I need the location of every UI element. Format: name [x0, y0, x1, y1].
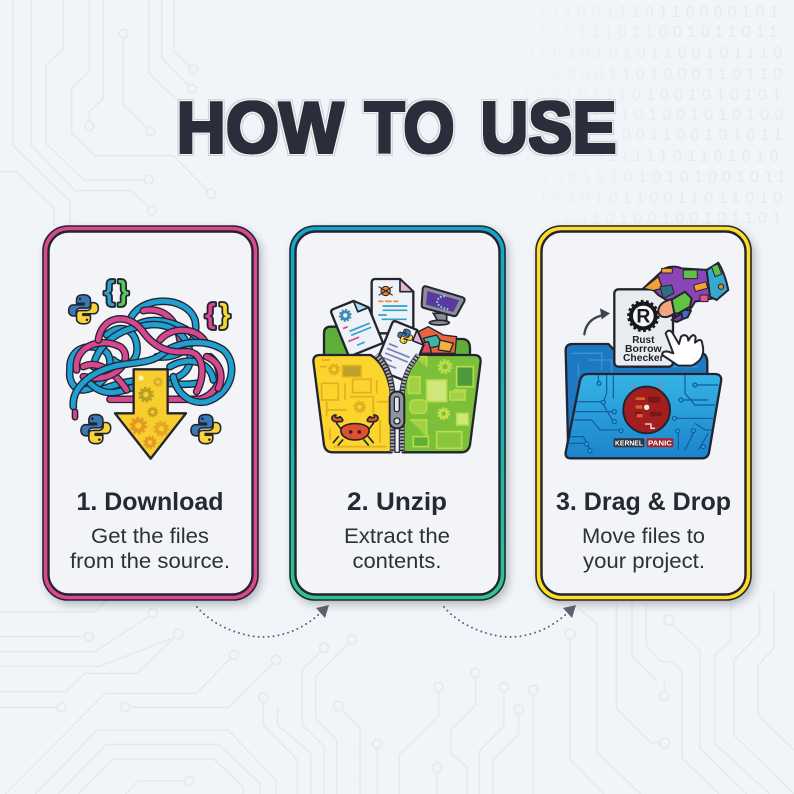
title: USE: [480, 88, 616, 168]
card frame 1: [43, 226, 258, 600]
text block 3: your project.: [583, 550, 705, 573]
binary pattern background: 0010101010100101010101001011: [400, 169, 791, 186]
icon: braces and python logos: }: [220, 298, 231, 329]
front of folder: [566, 374, 721, 458]
text block 3: Move files to: [582, 525, 705, 548]
kernel panic label: [614, 438, 673, 447]
panel: step 3 drag and drop: [536, 226, 751, 600]
text block 2: Extract the: [344, 525, 450, 548]
text block 3: [582, 525, 705, 573]
icon: braces and python logos: [69, 275, 231, 444]
binary pattern background: 1001101001110111011001011011: [400, 24, 782, 41]
icon: crab: [332, 415, 378, 445]
icon: braces and python logos: {: [104, 275, 115, 306]
text block 1: [70, 525, 230, 573]
zipper pull: [390, 392, 404, 428]
arrow: step 2 to step 3: [444, 605, 576, 637]
green folder half: [403, 355, 481, 452]
back of folder: [566, 344, 707, 453]
icon: monitor: [422, 286, 465, 325]
binary pattern background: 0110101011001001001100101011: [400, 127, 787, 144]
arrow: step 1 to step 2: [197, 605, 329, 637]
panel: step 1 download: [43, 226, 258, 600]
binary pattern background: 1100010010101010110011011010: [400, 190, 787, 207]
icon: folder with rust file and hand: [566, 263, 728, 458]
icon: document with gear: [330, 297, 383, 357]
yellow folder half: [313, 355, 392, 452]
title: [176, 88, 616, 168]
text block 1: from the source.: [70, 550, 230, 573]
zipper: [376, 354, 418, 452]
panel: step 2 unzip: [290, 226, 505, 600]
binary pattern background: 1010110100010001101000110110: [400, 66, 787, 83]
cables: [70, 301, 232, 417]
circuit traces bottom: [0, 590, 794, 794]
text block 2: [344, 525, 450, 573]
circuit pattern: [568, 375, 718, 453]
back of folder: [324, 327, 470, 360]
icon: download arrow: [115, 369, 186, 459]
kernel panic label: KERNEL: [615, 438, 643, 447]
icon: kernel panic chip: [623, 382, 670, 433]
icon: pointer hand: [662, 331, 703, 366]
binary pattern background: 0110100110111001110110000101: [400, 4, 784, 21]
binary pattern background: 0100110100101010101100101110: [400, 45, 787, 62]
binary pattern background: 1100100111001011101001010101: [400, 87, 786, 104]
icon: colorful hand: [643, 263, 728, 322]
kernel panic label: PANIC: [648, 438, 673, 447]
pile of files: [418, 327, 457, 353]
icon: rust logo: R: [636, 307, 650, 328]
title: TO: [364, 88, 454, 168]
card frame 2: [290, 226, 505, 600]
binary pattern background: 0111001100110010100100101101: [400, 210, 786, 227]
icon: braces and python logos: }: [118, 275, 129, 306]
heading 2: 2. Unzip: [347, 488, 447, 516]
card frame 3: [536, 226, 751, 600]
rust borrow checker file: Checker: [623, 353, 664, 364]
circuit traces top left: [0, 0, 216, 227]
icon: tangled cables cloud with download arrow: [69, 275, 232, 459]
heading 1: 1. Download: [76, 488, 224, 516]
icon: unzipped folder with files: [313, 279, 481, 452]
binary pattern background: 1001010110101110101001010100: [400, 107, 788, 124]
icon: braces and python logos: {: [205, 298, 216, 329]
icon: document with python logo: [374, 320, 428, 382]
title: HOW: [176, 88, 344, 168]
text block 2: contents.: [352, 550, 442, 573]
icon: document with bug: [372, 279, 413, 333]
rust borrow checker file: [614, 289, 673, 367]
binary pattern background: [400, 4, 791, 227]
curved arrow: [584, 308, 610, 334]
heading 3: 3. Drag & Drop: [556, 488, 731, 516]
binary pattern background: 1011001011010101111101101010: [400, 148, 784, 165]
rust borrow checker file: Rust: [632, 335, 655, 346]
rust borrow checker file: Borrow: [625, 344, 662, 355]
text block 1: Get the files: [91, 525, 209, 548]
